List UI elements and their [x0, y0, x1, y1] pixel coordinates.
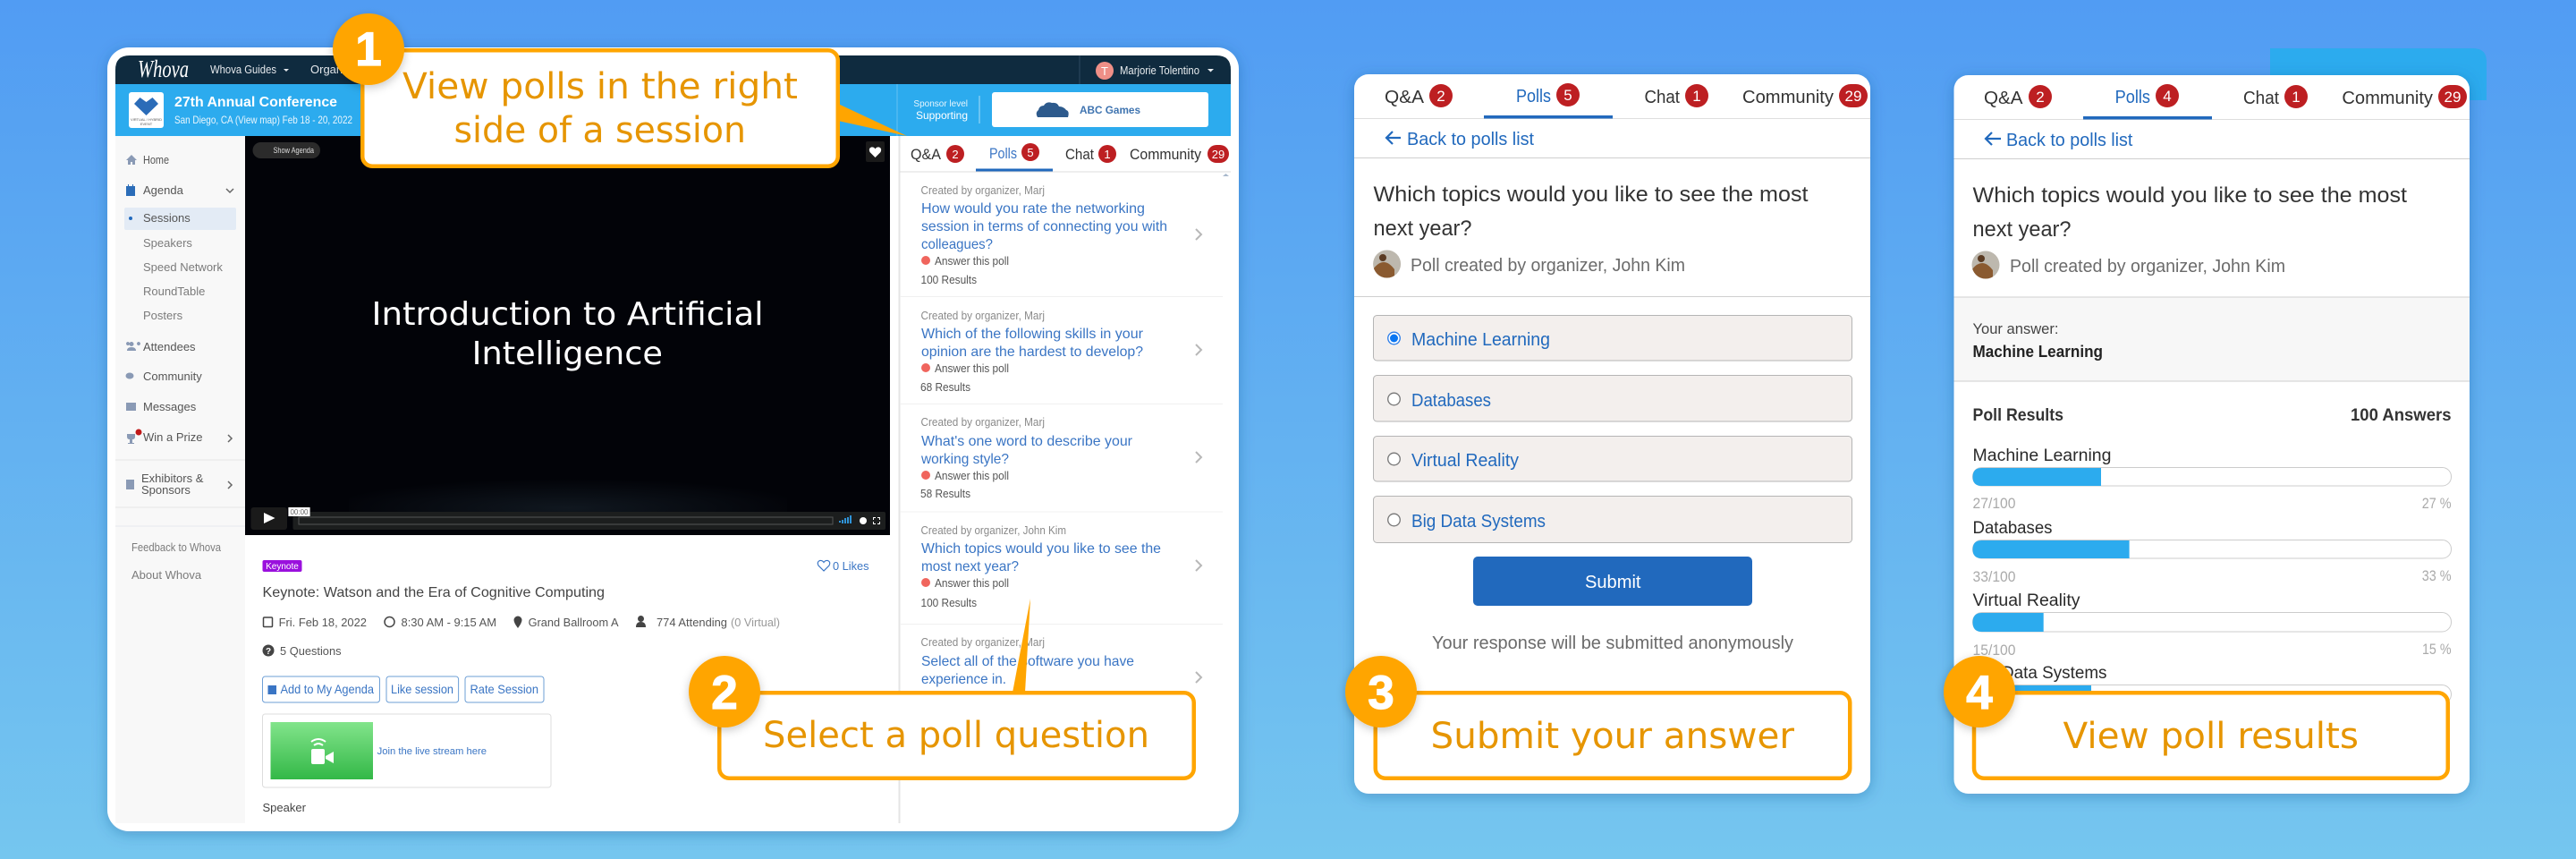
answer option: machine learning — [1374, 315, 1852, 361]
poll item 5: Created by organizer, Marj — [921, 636, 1045, 649]
nav icon: agenda — [126, 184, 135, 196]
result bar: virtual reality: 15/100 — [1973, 642, 2016, 659]
tabs: session panel: 29 — [1212, 148, 1224, 161]
back link: Back to polls list — [2006, 131, 2133, 150]
poll item 2: 68 Results — [920, 381, 970, 394]
answer option: databases — [1374, 376, 1852, 421]
tabs: results card: 2 — [2036, 89, 2045, 106]
video title: Introduction to Artificial — [372, 296, 764, 333]
sidebar navigation — [115, 136, 245, 823]
sidebar navigation: Community — [143, 370, 202, 383]
poll question — [1973, 183, 2407, 242]
tabs: results card: 29 — [2445, 89, 2461, 106]
tabs: session panel: Polls — [989, 145, 1017, 162]
tabs: answer card: Chat — [1644, 88, 1680, 107]
event banner: EVENT — [140, 122, 153, 126]
poll item 1: colleagues? — [921, 237, 993, 252]
event banner: Sponsor level — [913, 99, 968, 109]
poll item 4: Which topics would you like to see the — [921, 541, 1161, 557]
sidebar navigation: About Whova — [131, 568, 202, 582]
poll item 5: Select all of the software you have — [921, 654, 1134, 669]
top navigation bar: Marjorie Tolentino — [1120, 64, 1199, 77]
questions count — [263, 644, 274, 657]
arrow: callout 2 pointer — [1013, 599, 1030, 693]
poll item 2: Which of the following skills in your — [921, 327, 1144, 342]
session metadata row: Grand Ballroom A — [529, 616, 619, 629]
nav icon: home — [126, 155, 137, 165]
result bar: databases: 33 % — [2422, 567, 2451, 584]
callout 1: view polls — [362, 50, 907, 166]
poll creator: Poll created by organizer, John Kim — [2010, 257, 2285, 276]
nav icon: prize — [127, 434, 135, 444]
show agenda button — [252, 142, 320, 158]
callout 2: select a poll question — [719, 599, 1194, 778]
poll item 1: How would you rate the networking — [921, 201, 1145, 217]
sidebar navigation: RoundTable — [143, 285, 205, 298]
step badge 3: 3 — [1368, 667, 1394, 719]
panel: poll answer card — [1354, 74, 1870, 794]
decorative blue tab behind results card — [2270, 48, 2487, 100]
callout 1: view polls: side of a session — [454, 110, 746, 151]
poll item 3 — [920, 416, 1201, 500]
callout 4: view poll results: View poll results — [2063, 716, 2359, 757]
tabs: session panel: Chat — [1065, 146, 1094, 163]
sidebar navigation: Sponsors — [141, 483, 191, 497]
poll item 4: Created by organizer, John Kim — [921, 524, 1066, 537]
result bar: machine learning: Machine Learning — [1973, 447, 2111, 465]
tabs: results card: 1 — [2292, 89, 2301, 106]
callout 3: submit your answer: Submit your answer — [1431, 716, 1795, 757]
nav icon: exhibitors — [126, 480, 134, 489]
action buttons — [263, 676, 544, 702]
sidebar navigation: Messages — [143, 400, 197, 413]
event banner — [115, 84, 1231, 136]
step badge 1 — [333, 13, 404, 85]
panel: poll results card — [1953, 75, 2470, 794]
organizer avatar — [1971, 251, 2000, 279]
action buttons: Add to My Agenda — [281, 682, 374, 696]
result bar: big data systems: Big Data Systems — [1973, 664, 2107, 683]
nav icon: messages — [126, 403, 136, 411]
tabs: answer card: Polls — [1516, 87, 1551, 106]
anonymity note: Your response will be submitted anonymously — [1432, 634, 1793, 653]
results header — [1973, 406, 2451, 425]
tabs: results card: Polls — [2115, 88, 2150, 107]
poll question: Which topics would you like to see the most — [1973, 183, 2407, 208]
arrow: callout 1 pointer — [838, 104, 907, 136]
poll item 3: 58 Results — [920, 488, 970, 500]
step badge 4: 4 — [1966, 667, 1993, 719]
result bar: virtual reality: 15 % — [2422, 641, 2451, 658]
poll item 1: 100 Results — [921, 274, 977, 286]
tabs: results card: Q&A — [1984, 89, 2023, 108]
event banner: San Diego, CA (View map) Feb 18 - 20, 2022 — [174, 114, 352, 126]
sidebar navigation: Exhibitors & — [141, 472, 204, 485]
tabs: results card: 4 — [2163, 88, 2172, 105]
poll question: Which topics would you like to see the most — [1374, 183, 1809, 207]
answer option: databases: Databases — [1411, 391, 1491, 411]
step badge 3 — [1345, 656, 1417, 727]
poll item 1: session in terms of connecting you with — [921, 219, 1167, 234]
tabs: results card: Chat — [2243, 89, 2279, 108]
answer option: big data systems — [1374, 496, 1852, 542]
session title: Keynote: Watson and the Era of Cognitive Computing — [263, 585, 605, 600]
session details: ? — [266, 647, 271, 657]
top navigation bar: Whova Guides — [210, 63, 276, 76]
tabs: session panel: 2 — [952, 148, 959, 161]
tabs: answer card: Q&A — [1385, 88, 1425, 107]
poll item 4 — [921, 524, 1201, 609]
callout 2: select a poll question: Select a poll question — [763, 715, 1149, 756]
tabs: answer card: 29 — [1845, 88, 1861, 105]
top navigation bar: Organizer — [310, 63, 362, 76]
event banner: ABC Games — [1080, 104, 1140, 116]
your answer section — [1953, 297, 2470, 381]
callout 1: view polls: View polls in the right — [402, 66, 798, 107]
sidebar navigation: Speakers — [143, 236, 192, 250]
live stream card — [263, 714, 551, 787]
sidebar navigation: Posters — [143, 309, 183, 322]
top navigation bar — [115, 55, 1231, 84]
session metadata row — [263, 616, 780, 629]
poll item 4: Answer this poll — [935, 577, 1009, 590]
action buttons: Rate Session — [470, 682, 538, 696]
like heart button — [866, 141, 885, 162]
live stream card: Join the live stream here — [377, 746, 487, 757]
poll item 4: most next year? — [921, 559, 1019, 574]
tabs: answer card: Community — [1742, 88, 1834, 107]
video player — [245, 136, 890, 535]
poll question: next year? — [1973, 217, 2072, 242]
top navigation bar: T — [1101, 64, 1108, 78]
sidebar navigation: Attendees — [143, 340, 196, 353]
tabs: session panel: Community — [1130, 146, 1201, 163]
poll item 2: Answer this poll — [935, 362, 1009, 375]
step badge 4 — [1944, 656, 2015, 727]
keynote tag — [263, 560, 302, 572]
tabs: session panel: 1 — [1104, 148, 1111, 161]
event banner: VIRTUAL / HYBRID — [131, 117, 162, 122]
event banner: Supporting — [916, 109, 968, 122]
poll item 3: working style? — [920, 452, 1009, 467]
nav icon: attendees — [126, 342, 140, 351]
your answer section: Your answer: — [1973, 320, 2059, 337]
poll item 2: Created by organizer, Marj — [921, 310, 1045, 322]
tabs: answer card — [1354, 83, 1870, 118]
callout 4: view poll results — [1974, 693, 2448, 778]
poll item 5 — [921, 636, 1201, 687]
poll item 1 — [921, 184, 1201, 286]
step badge 1: 1 — [355, 23, 382, 76]
top navigation bar: Whova — [138, 55, 189, 82]
poll creator: Poll created by organizer, John Kim — [1411, 256, 1685, 276]
sidebar navigation: Speed Network — [143, 260, 223, 274]
back link: Back to polls list — [1407, 130, 1534, 149]
tabs: session panel: 5 — [1027, 146, 1034, 159]
tabs: results card: Community — [2342, 89, 2433, 108]
sidebar navigation: Home — [143, 153, 169, 166]
result bar: databases — [1973, 519, 2451, 585]
tabs: answer card: 5 — [1563, 87, 1572, 104]
result bar: virtual reality: Virtual Reality — [1973, 591, 2080, 610]
session details: 5 Questions — [280, 644, 342, 658]
poll item 4: 100 Results — [921, 597, 977, 609]
session details — [263, 559, 869, 814]
sidebar navigation: Agenda — [143, 183, 184, 197]
nav icon: community — [125, 372, 134, 379]
poll item 5: experience in. — [921, 672, 1006, 687]
session metadata row: 774 Attending — [657, 616, 727, 629]
organizer avatar — [1373, 250, 1402, 278]
poll item 1: Created by organizer, Marj — [921, 184, 1045, 197]
sidebar navigation: Sessions — [143, 211, 191, 225]
submit button: Submit — [1585, 573, 1641, 592]
result bar: virtual reality — [1973, 591, 2451, 659]
session metadata row: (0 Virtual) — [731, 616, 780, 629]
sidebar navigation: Feedback to Whova — [131, 540, 222, 554]
event banner: 27th Annual Conference — [174, 95, 337, 110]
tabs: session panel: Q&A — [911, 146, 942, 163]
results header: Poll Results — [1973, 406, 2063, 425]
answer option: machine learning: Machine Learning — [1411, 330, 1550, 350]
result bar: databases: 33/100 — [1973, 568, 2016, 585]
action buttons: Like session — [391, 682, 453, 696]
poll item 2 — [920, 310, 1201, 394]
video player: Show Agenda — [274, 146, 314, 155]
poll item 3: What's one word to describe your — [921, 434, 1133, 449]
your answer section: Machine Learning — [1973, 343, 2103, 361]
session details: Keynote — [266, 562, 299, 572]
answer option: big data systems: Big Data Systems — [1411, 512, 1546, 532]
result bar: machine learning: 27/100 — [1973, 495, 2016, 512]
poll item 1: Answer this poll — [935, 255, 1009, 268]
poll question: next year? — [1374, 217, 1472, 241]
poll item 3: Created by organizer, Marj — [921, 416, 1045, 429]
session details: 0 Likes — [833, 559, 869, 573]
result bar: machine learning: 27 % — [2422, 495, 2451, 512]
panel: polls sidebar — [900, 136, 1231, 823]
result bar: big data systems — [1973, 664, 2451, 703]
result bar: machine learning — [1973, 447, 2451, 512]
result bar: databases: Databases — [1973, 519, 2052, 538]
speaker heading: Speaker — [263, 801, 307, 814]
step badge 2 — [689, 656, 760, 727]
likes counter — [818, 560, 830, 571]
tabs: results card — [1953, 84, 2470, 120]
submit button — [1473, 557, 1752, 606]
tabs: session panel — [900, 143, 1231, 172]
answer option: virtual reality: Virtual Reality — [1411, 451, 1519, 471]
tabs: answer card: 1 — [1692, 88, 1701, 105]
answer option: virtual reality — [1374, 437, 1852, 481]
session metadata row: Fri. Feb 18, 2022 — [279, 616, 367, 629]
nav item: sessions active — [124, 208, 236, 230]
sidebar navigation: Win a Prize — [143, 430, 202, 444]
panel: desktop session screenshot card — [107, 47, 1239, 831]
poll question — [1374, 183, 1809, 241]
player controls: 00:00 — [290, 508, 309, 516]
scroll marker — [1223, 174, 1229, 176]
results header: 100 Answers — [2351, 406, 2451, 425]
player controls — [250, 507, 886, 530]
tabs: answer card: 2 — [1436, 88, 1445, 105]
poll item 2: opinion are the hardest to develop? — [921, 344, 1143, 360]
session metadata row: 8:30 AM - 9:15 AM — [401, 616, 496, 629]
poll item 3: Answer this poll — [935, 470, 1009, 482]
callout 3: submit your answer — [1376, 693, 1850, 778]
video player: Intelligence — [472, 336, 663, 372]
step badge 2: 2 — [711, 667, 738, 719]
